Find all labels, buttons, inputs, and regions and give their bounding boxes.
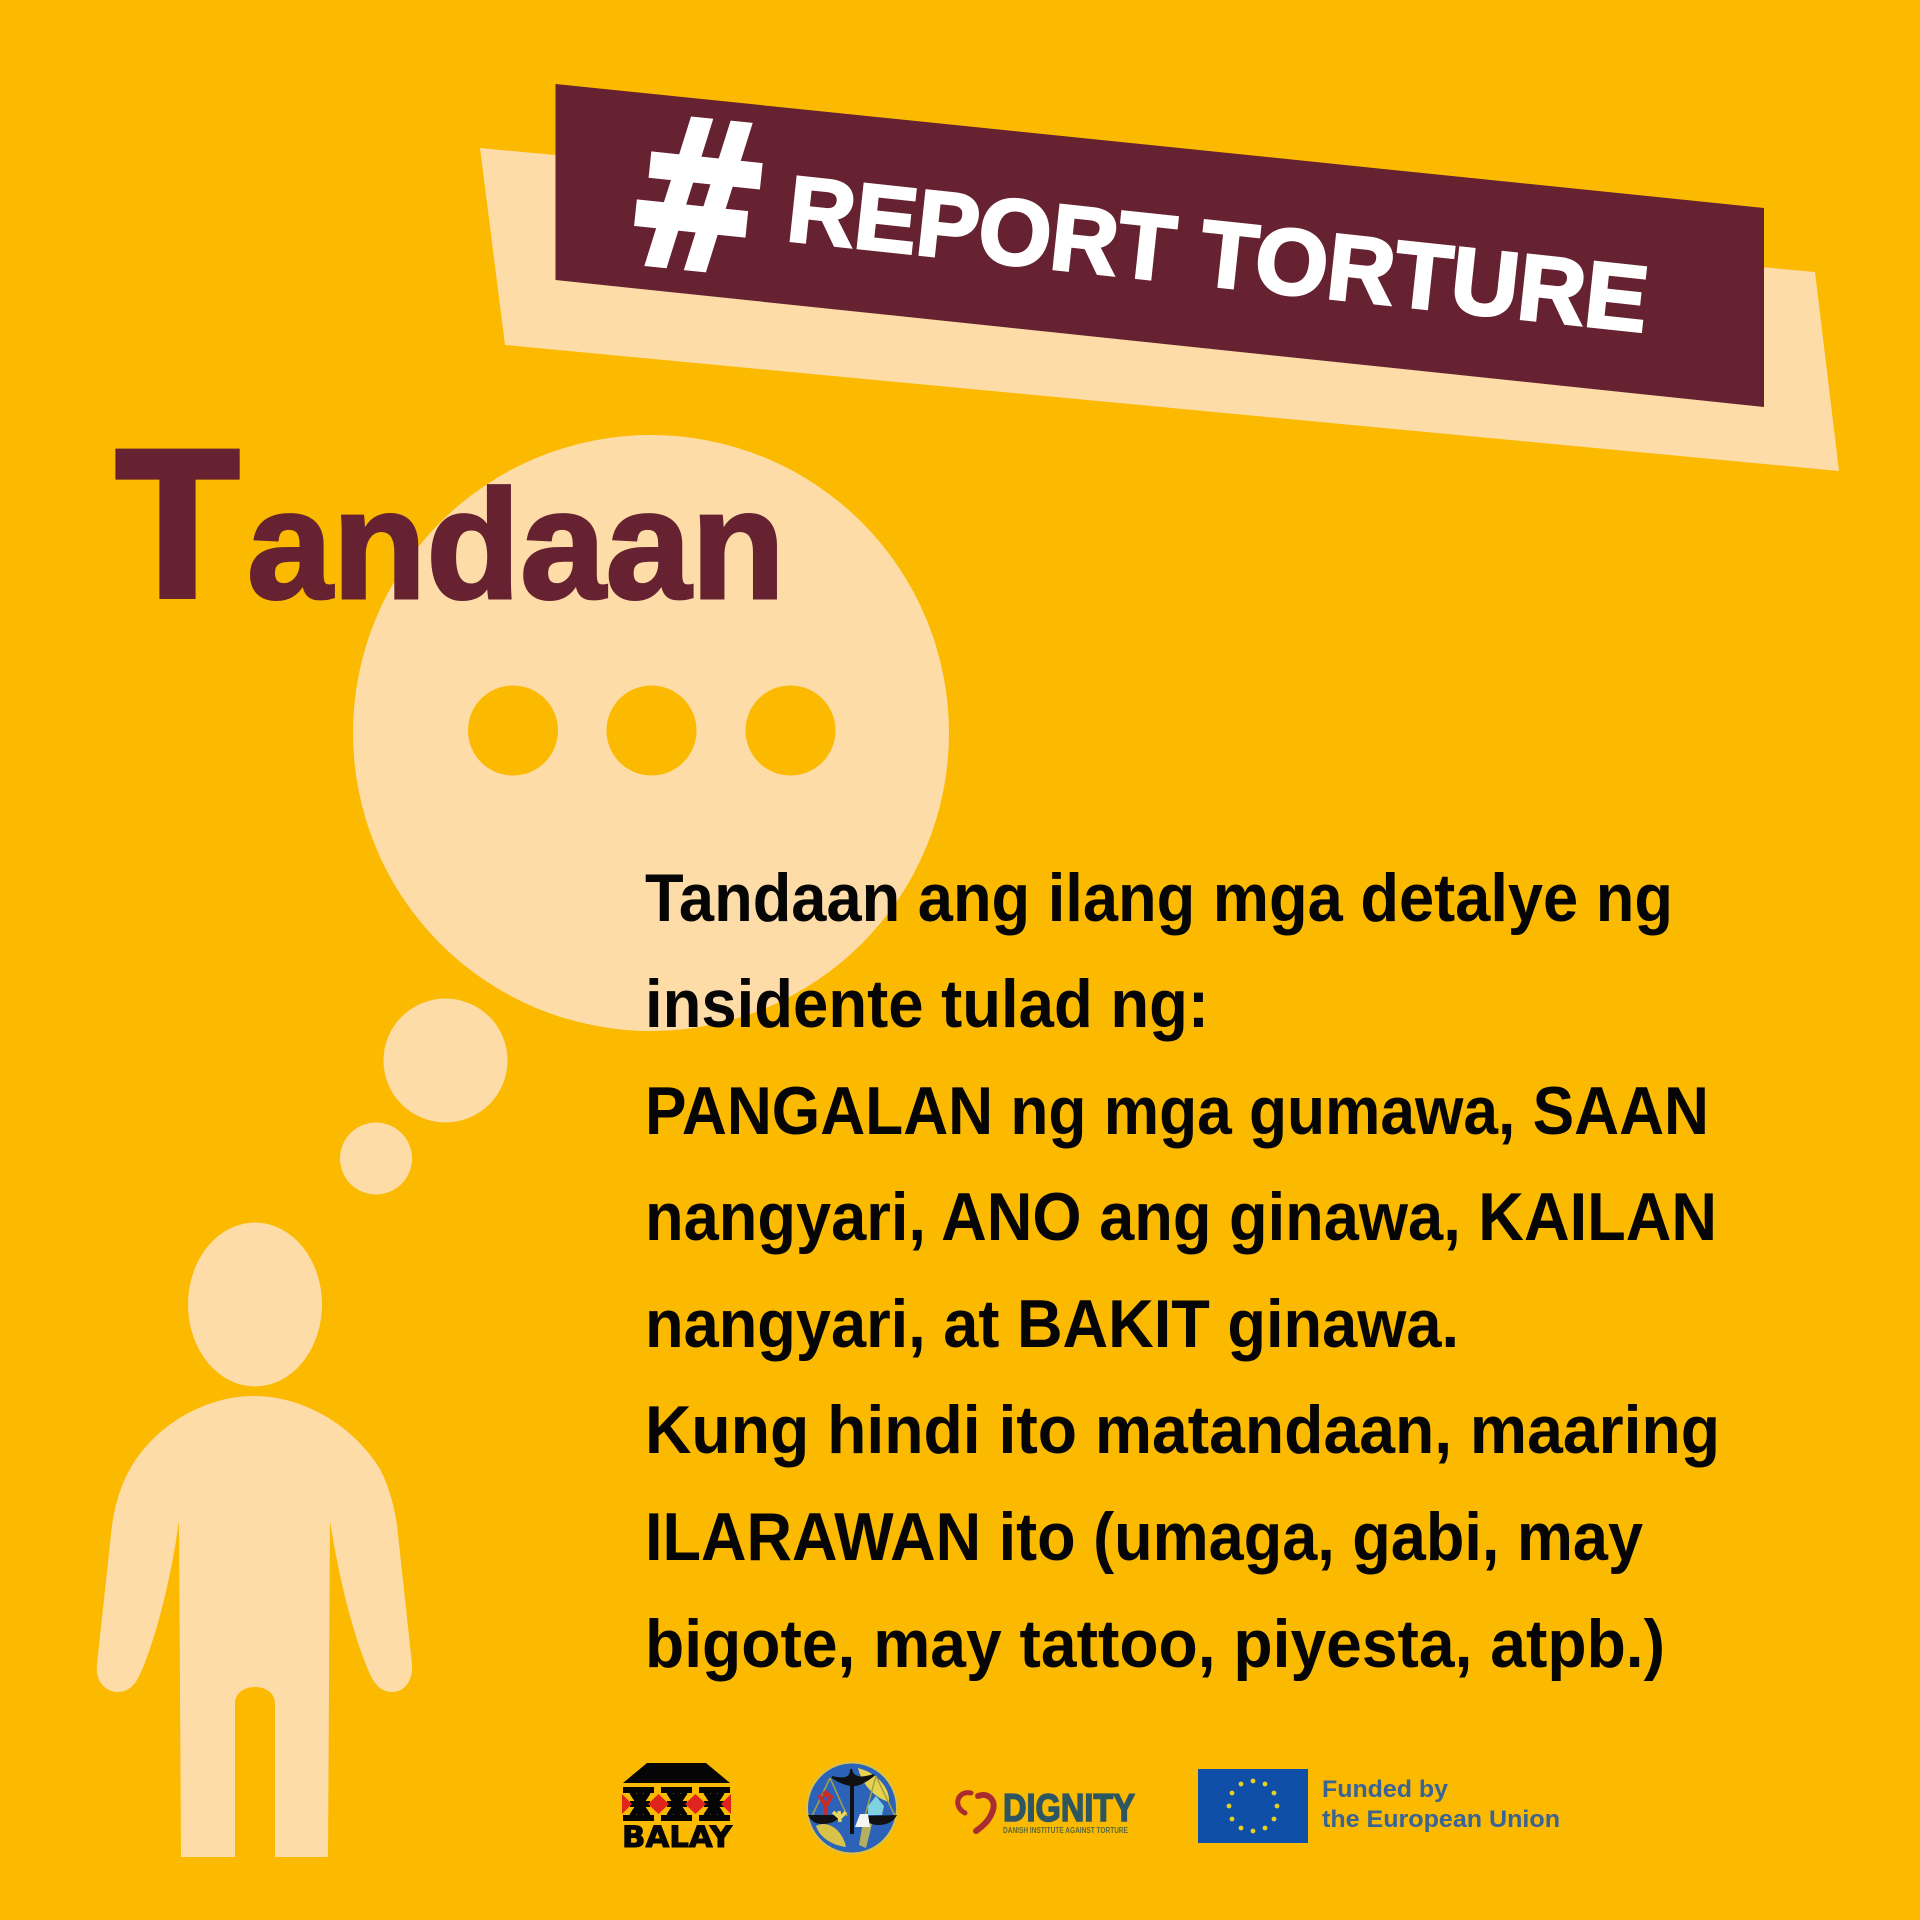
body	[97, 1396, 412, 1857]
logo: scales emblem	[807, 1762, 897, 1854]
title remainder: andaan	[247, 458, 785, 631]
banner: report torture	[480, 70, 1839, 471]
logo: Dignity	[958, 1787, 1135, 1835]
body text: bigote, may tattoo, piyesta, atpb.)	[645, 1606, 1665, 1682]
body text: nangyari, at BAKIT ginawa.	[645, 1286, 1459, 1362]
body text: insidente tulad ng:	[645, 966, 1209, 1042]
funded by text: the European Union	[1322, 1806, 1560, 1833]
body text: Kung hindi ito matandaan, maaring	[645, 1392, 1720, 1468]
body text: Tandaan ang ilang mga detalye ng	[645, 860, 1673, 936]
body text: nangyari, ANO ang ginawa, KAILAN	[645, 1179, 1717, 1255]
main bubble	[353, 435, 949, 1031]
funded by text	[1322, 1776, 1560, 1833]
body text: PANGALAN ng mga gumawa, SAAN	[645, 1073, 1709, 1149]
logo: Balay: BALAY	[622, 1820, 733, 1854]
small bubble	[340, 1122, 412, 1194]
banner maroon panel	[556, 84, 1764, 407]
banner cream backing	[480, 148, 1839, 471]
head	[188, 1222, 322, 1386]
logo: EU flag	[1198, 1769, 1308, 1843]
dignity wordmark: DIGNITY	[1003, 1787, 1135, 1830]
dignity heart	[958, 1793, 994, 1831]
funded by text: Funded by	[1322, 1776, 1449, 1803]
person icon	[97, 1222, 412, 1857]
title large initial: T	[117, 408, 238, 639]
banner heading: REPORT TORTURE	[783, 156, 1653, 352]
medium bubble	[384, 998, 508, 1122]
logo: Balay	[622, 1763, 733, 1854]
dignity subtitle: DANISH INSTITUTE AGAINST TORTURE	[1003, 1826, 1129, 1835]
body text: ILARAWAN ito (umaga, gabi, may	[645, 1499, 1643, 1575]
ellipsis dots	[468, 686, 836, 776]
body text	[645, 860, 1720, 1682]
thought bubble	[340, 435, 949, 1194]
title	[117, 408, 785, 639]
hash symbol: #	[616, 70, 780, 324]
